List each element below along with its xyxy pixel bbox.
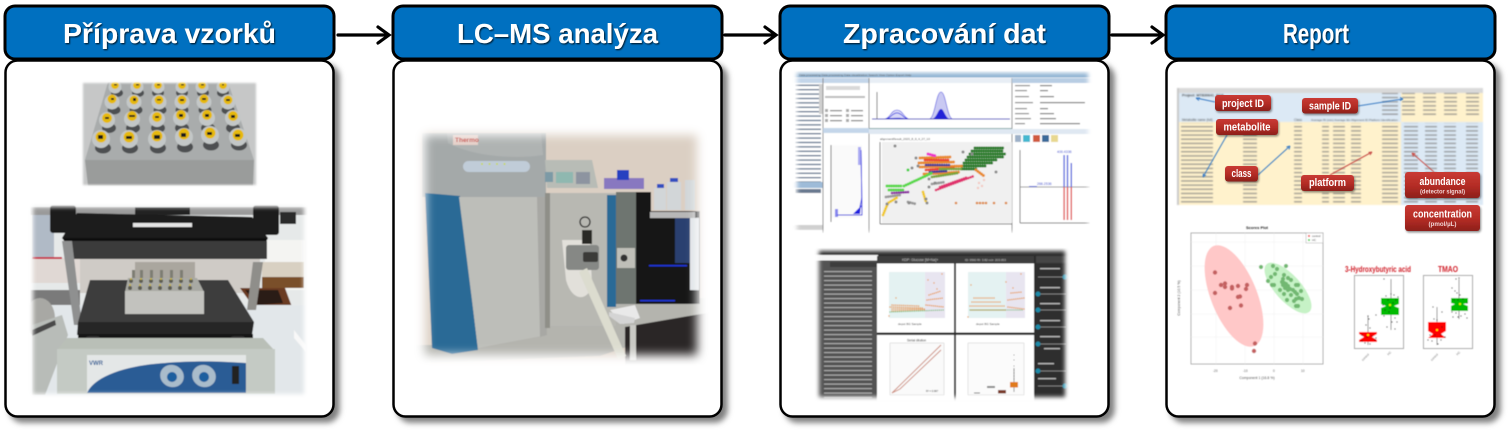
panel right: compound info xyxy=(1012,78,1094,124)
scatter plot: aligned spots: alignmentResult_2023_8_9_4_27_10 xyxy=(880,137,930,141)
arrow 2 xyxy=(725,27,776,43)
project label: Project: MTB30641_POS xyxy=(1182,94,1224,98)
box plot panel xyxy=(956,335,1034,401)
chromatogram xyxy=(872,92,1010,119)
MS/MS spectrum: 400.4336 xyxy=(1057,150,1072,154)
MS/MS spectrum xyxy=(1015,135,1090,223)
dilution panel: Serial dilution xyxy=(907,338,926,342)
panel body xyxy=(1166,60,1494,416)
header: Zpracování dat: Zpracování dat xyxy=(843,18,1046,49)
box plot: TMAO: HC xyxy=(1455,350,1462,356)
panel body xyxy=(780,60,1108,416)
callout: sample ID: sample ID xyxy=(1309,100,1351,112)
header: LC–MS analýza: LC–MS analýza xyxy=(457,18,659,49)
peak spot navigator xyxy=(825,86,865,122)
panel: Příprava vzorků xyxy=(6,60,334,416)
PCA score plot: Component 1 (16.8 %) xyxy=(1239,376,1275,380)
screenshot: QC viewer: KDP: Glucose [M+Na]+ xyxy=(902,258,938,262)
label: Thermo logo: Thermo xyxy=(455,137,479,144)
PCA score plot: -10 xyxy=(1243,369,1248,373)
panel body xyxy=(6,60,334,416)
menu text: Data processing Data processing Data visualization Search View Option Export Help xyxy=(799,73,912,77)
data table: Class xyxy=(1294,118,1302,122)
PCA score plot xyxy=(1177,225,1323,380)
QC panel top left xyxy=(877,264,954,332)
panel: LC–MS analýza xyxy=(394,60,722,416)
photo: vortex shaker xyxy=(25,203,310,400)
callout: concentration xyxy=(1405,205,1480,231)
data table xyxy=(1177,88,1483,205)
PCA score plot: 0 xyxy=(1273,369,1275,373)
photo: vial block xyxy=(80,80,260,188)
compound list xyxy=(824,268,872,398)
callout: sample ID xyxy=(1302,98,1358,114)
photo: mass spectrometer xyxy=(419,130,706,364)
callout: metabolite xyxy=(1216,119,1278,135)
callout: abundance: (detector signal) xyxy=(1420,188,1465,196)
PCA score plot: 10 xyxy=(1301,369,1305,373)
panel: Zpracování dat xyxy=(780,60,1108,416)
box plot: 3-Hydroxybutyric acid: control xyxy=(1361,352,1370,362)
callout: metabolite: metabolite xyxy=(1224,122,1270,134)
arrow 1 xyxy=(338,27,389,43)
header: Report: Report xyxy=(1283,18,1349,49)
callout: platform xyxy=(1301,175,1354,191)
screenshot: QC viewer xyxy=(812,248,1072,403)
header: Příprava vzorků xyxy=(5,6,334,59)
callout: abundance xyxy=(1405,172,1480,198)
callout: concentration: (pmol/µL) xyxy=(1428,221,1456,228)
panel body xyxy=(394,60,722,416)
heading: 3-Hydroxybutyric acid: 3-Hydroxybutyric acid xyxy=(1345,265,1411,274)
PCA score plot: control xyxy=(1312,234,1321,238)
PCA score plot: HC xyxy=(1312,238,1316,242)
callout: abundance: abundance xyxy=(1420,176,1466,188)
box plot: TMAO xyxy=(1424,276,1472,362)
callout: class xyxy=(1225,166,1258,182)
panel: Report xyxy=(1166,60,1494,416)
box plot: 3-Hydroxybutyric acid: HC xyxy=(1386,350,1393,356)
survey spectrum xyxy=(831,145,862,222)
header: Příprava vzorků: Příprava vzorků xyxy=(63,18,276,49)
PCA score plot: Scores Plot xyxy=(1246,225,1269,230)
label: VWR logo: VWR xyxy=(89,361,104,367)
slider panel xyxy=(1034,267,1068,390)
box plots xyxy=(1345,265,1472,362)
callout: project ID xyxy=(1215,95,1271,111)
callout: project ID: project ID xyxy=(1222,98,1264,110)
screenshot: QC viewer: ID: 9560 RI: 3.82 m/z: 203.053 xyxy=(965,258,1006,262)
PCA score plot: -20 xyxy=(1213,369,1218,373)
dilution panel xyxy=(877,335,954,401)
data table: Average Rt (min) Average Mz Alignment ID Platform Identification xyxy=(1311,118,1398,122)
scatter plot: aligned spots xyxy=(880,137,1012,224)
header: Zpracování dat xyxy=(780,6,1109,59)
box plot: 3-Hydroxybutyric acid xyxy=(1354,276,1404,362)
QC panel top left: depot BG Sample xyxy=(898,322,922,326)
dilution panel: R² = 0.997 xyxy=(926,389,939,393)
QC panel top right xyxy=(956,264,1034,332)
callout: platform: platform xyxy=(1309,177,1346,189)
MS/MS spectrum: 266.2536 xyxy=(1037,182,1052,186)
callout: class: class xyxy=(1232,168,1252,180)
arrow 3 xyxy=(1112,27,1163,43)
data table: Metabolite name (full) xyxy=(1182,118,1213,122)
heading: TMAO: TMAO xyxy=(1438,265,1458,274)
header: LC–MS analýza xyxy=(393,6,722,59)
callout arrows xyxy=(1196,98,1434,177)
PCA score plot: Component 2 (10.5 %) xyxy=(1177,280,1181,316)
QC panel top right: depot BG Sample xyxy=(976,322,1000,326)
box plot: TMAO: control xyxy=(1430,352,1439,362)
screenshot: MS-DIAL software xyxy=(792,70,1094,236)
callout: concentration: concentration xyxy=(1413,208,1472,220)
header: Report xyxy=(1166,6,1495,59)
